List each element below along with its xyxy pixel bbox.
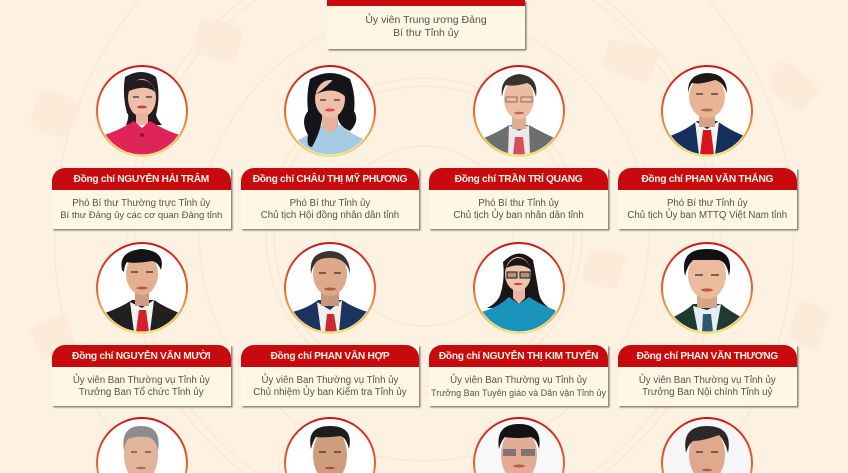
name <box>618 345 796 367</box>
position: Ủy viên Ban Thường vụ Tỉnh ủy <box>73 374 210 386</box>
position: Phó Bí thư Tỉnh ủy <box>667 198 748 208</box>
position <box>627 198 787 221</box>
name: Đồng chí PHAN VĂN THẮNG <box>641 174 773 185</box>
portrait: Trần Trí Quang <box>473 65 565 157</box>
position: Phó Bí thư Tỉnh ủy <box>290 198 370 208</box>
position <box>431 374 606 398</box>
portrait: Phan Văn Thương <box>661 242 753 334</box>
name: Đồng chí TRẦN TRÍ QUANG <box>455 174 582 185</box>
name <box>429 345 608 367</box>
portrait: Nguyễn Văn Mười <box>96 242 188 334</box>
position: Trưởng Ban Tuyên giáo và Dân vận Tỉnh ủy <box>431 388 606 398</box>
name: Đồng chí PHAN VĂN HỢP <box>270 351 389 362</box>
card: Nguyễn Văn Mười <box>52 345 230 406</box>
portrait: bottom row, fourth column <box>661 417 753 473</box>
card: Châu Thị Mỹ Phương <box>241 168 419 229</box>
card header: top leader <box>327 0 525 6</box>
portrait: Châu Thị Mỹ Phương <box>284 65 376 157</box>
name: Đồng chí CHÂU THỊ MỸ PHƯƠNG <box>253 174 407 185</box>
name: Đồng chí NGUYỄN VĂN MƯỜI <box>72 351 210 362</box>
portrait: Nguyễn Thị Kim Tuyến <box>473 242 565 334</box>
portrait: Phan Văn Thắng <box>661 65 753 157</box>
position <box>639 374 776 398</box>
position: Phó Bí thư Thường trực Tỉnh ủy <box>72 198 210 208</box>
name <box>429 168 608 190</box>
name <box>52 345 230 367</box>
position: top leader <box>365 14 487 39</box>
name <box>241 168 419 190</box>
position: Trưởng Ban Nội chính Tỉnh uỷ <box>642 387 772 398</box>
position: Trưởng Ban Tổ chức Tỉnh ủy <box>79 387 204 398</box>
position: Ủy viên Ban Thường vụ Tỉnh ủy <box>262 374 398 386</box>
position <box>73 374 210 398</box>
position: top leader: Bí thư Tỉnh ủy <box>393 27 459 39</box>
position: Chủ tịch Ủy ban MTTQ Việt Nam tỉnh <box>627 210 787 221</box>
name: Đồng chí PHAN VĂN THƯƠNG <box>637 351 778 362</box>
card: Nguyễn Thị Kim Tuyến <box>429 345 608 406</box>
position <box>261 198 399 221</box>
position: Bí thư Đảng ủy các cơ quan Đảng tỉnh <box>60 210 222 221</box>
position: top leader: Ủy viên Trung ương Đảng <box>365 14 487 26</box>
card: Phan Văn Thương <box>618 345 796 406</box>
position: Chủ tịch Hội đồng nhân dân tỉnh <box>261 210 399 221</box>
portrait: Nguyễn Hải Trâm <box>96 65 188 157</box>
card: top leader <box>327 0 525 49</box>
name <box>618 168 796 190</box>
position: Chủ tịch Ủy ban nhân dân tỉnh <box>453 210 584 221</box>
position <box>60 198 222 221</box>
portrait: bottom row, third column <box>473 417 565 473</box>
name <box>241 345 419 367</box>
name <box>52 168 230 190</box>
name: Đồng chí NGUYỄN HẢI TRÂM <box>74 174 209 185</box>
position: Phó Bí thư Tỉnh ủy <box>478 198 559 208</box>
name: Đồng chí NGUYỄN THỊ KIM TUYẾN <box>439 351 598 362</box>
card: Nguyễn Hải Trâm <box>52 168 230 229</box>
portrait: bottom row, second column <box>284 417 376 473</box>
position <box>253 374 407 398</box>
position <box>453 198 584 221</box>
position: Chủ nhiệm Ủy ban Kiểm tra Tỉnh ủy <box>253 387 407 398</box>
portrait: Phan Văn Hợp <box>284 242 376 334</box>
card: Phan Văn Thắng <box>618 168 796 229</box>
position: Ủy viên Ban Thường vụ Tỉnh ủy <box>450 374 587 386</box>
position: Ủy viên Ban Thường vụ Tỉnh ủy <box>639 374 776 386</box>
portrait: bottom row, first column <box>96 417 188 473</box>
card: Trần Trí Quang <box>429 168 608 229</box>
card: Phan Văn Hợp <box>241 345 419 406</box>
